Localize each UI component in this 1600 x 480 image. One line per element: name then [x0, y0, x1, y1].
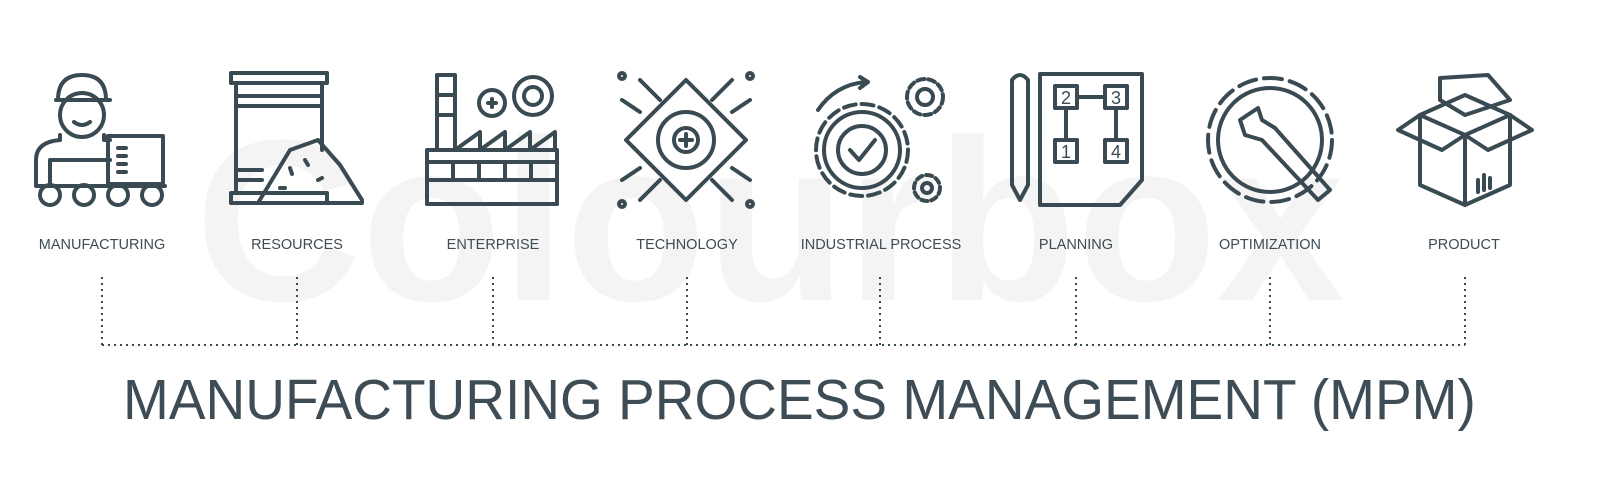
dotted connector lines [102, 277, 1465, 345]
icon: product box [1398, 75, 1532, 205]
icon: planning: 4 [1111, 142, 1121, 162]
main graphic: Colourbox [195, 92, 1345, 349]
icon: planning: 1 [1061, 142, 1071, 162]
icon: planning: 3 [1111, 88, 1121, 108]
icon: industrial process gears [816, 77, 943, 201]
labels [39, 237, 1500, 253]
icon: manufacturing worker [36, 75, 165, 205]
icon: planning: 2 [1061, 88, 1071, 108]
title: MANUFACTURING PROCESS MANAGEMENT (MPM) [123, 368, 1476, 432]
labels: INDUSTRIAL PROCESS [801, 237, 961, 253]
labels: MANUFACTURING [39, 237, 165, 253]
labels: RESOURCES [251, 237, 343, 253]
icon: technology chip [619, 73, 753, 207]
icon: optimization [1208, 78, 1332, 202]
icon: planning [1012, 74, 1142, 205]
labels: PRODUCT [1428, 237, 1500, 253]
labels: PLANNING [1039, 237, 1113, 253]
icon: resources barrel [231, 73, 362, 203]
labels: TECHNOLOGY [636, 237, 738, 253]
icon: enterprise factory [427, 75, 557, 204]
labels: ENTERPRISE [447, 237, 540, 253]
labels: OPTIMIZATION [1219, 237, 1321, 253]
